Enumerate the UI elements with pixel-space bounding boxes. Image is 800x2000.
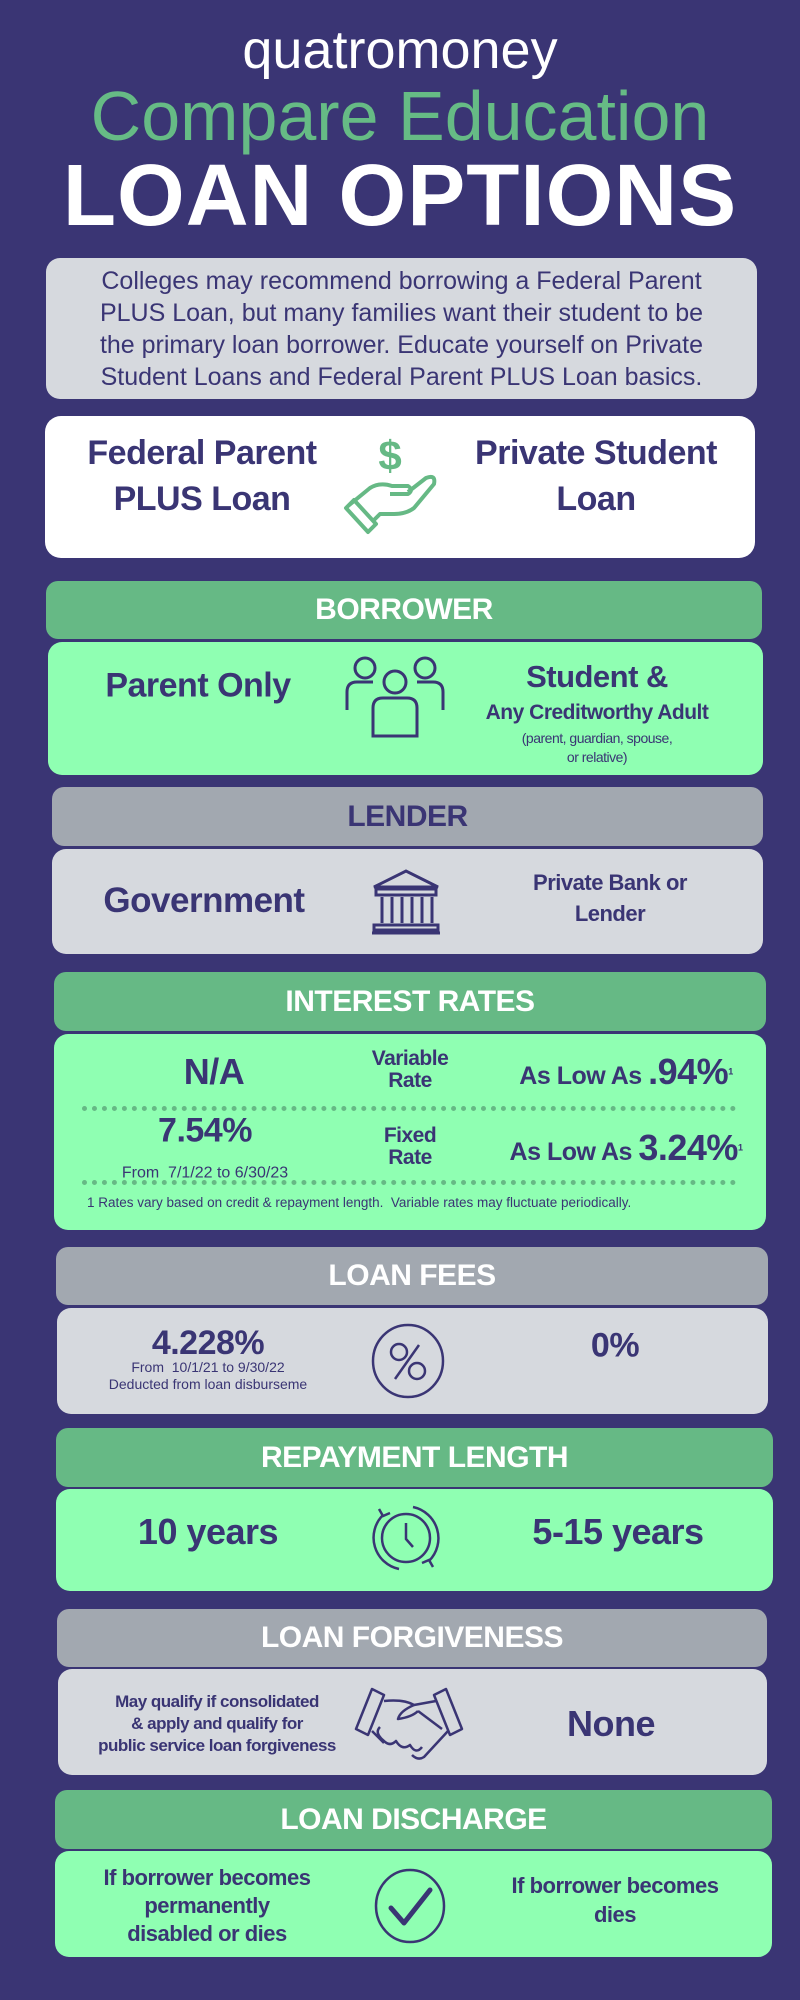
text: N/A: N/A (184, 1051, 244, 1092)
text: None: None (567, 1703, 655, 1744)
label: Fixed Rate: Rate (388, 1146, 432, 1169)
text: 7.54%: From 7/1/22 to 6/30/23 (122, 1164, 288, 1182)
label: Variable Rate: Variable (372, 1047, 448, 1070)
text: fixed private rate: As Low As 3.24%1 (510, 1127, 742, 1168)
text: Student & Any Creditworthy Adult: or relative) (567, 749, 627, 765)
right title: Private Student Loan: Private Student (475, 434, 717, 472)
panel: repayment length (56, 1489, 773, 1591)
intro text box: PLUS Loan, but many families want their student to be (100, 299, 703, 327)
text: discharge conditions federal: If borrower becomes (104, 1865, 310, 1890)
intro text box: Colleges may recommend borrowing a Federal Parent (101, 267, 702, 295)
icon: handshake (354, 1688, 464, 1760)
text: 4.228%: 4.228% (152, 1324, 264, 1362)
intro text box: Student Loans and Federal Parent PLUS Loan basics. (101, 363, 702, 391)
text: 5-15 years: 5-15 years (532, 1511, 704, 1552)
text: 7.54% (122, 1112, 288, 1182)
icon: hand with dollar: $ (378, 432, 402, 479)
icon: percent circle (372, 1324, 444, 1398)
text: Student & Any Creditworthy Adult (486, 659, 709, 765)
icon: clock with arrows (372, 1506, 440, 1570)
panel: interest rates (54, 1034, 766, 1230)
text: forgiveness conditions: & apply and qualify for (131, 1714, 303, 1733)
header: LOAN FEES: LOAN FEES (328, 1259, 496, 1292)
header: BORROWER (46, 581, 762, 639)
label: Fixed Rate: Fixed (384, 1124, 436, 1147)
text: discharge conditions federal (104, 1865, 310, 1946)
header: INTEREST RATES: INTEREST RATES (285, 984, 535, 1018)
left title: Federal Parent PLUS Loan: PLUS Loan (114, 480, 290, 518)
right title: Private Student Loan (475, 434, 718, 518)
text: variable private rate: As Low As .94%1 (519, 1051, 733, 1092)
header: LOAN FORGIVENESS: LOAN FORGIVENESS (261, 1621, 563, 1654)
header: LOAN FEES (56, 1247, 768, 1305)
text: 0%: 0% (591, 1326, 639, 1364)
text: Government: Government (103, 881, 305, 920)
intro text box (46, 258, 757, 399)
left title: Federal Parent PLUS Loan (87, 434, 317, 518)
text: 7.54%: 7.54% (158, 1112, 252, 1150)
text: forgiveness conditions: public service loan forgiveness (98, 1736, 336, 1755)
text: 4.228%: From 10/1/21 to 9/30/22 (131, 1359, 285, 1375)
icon: bank building (372, 869, 440, 934)
text: discharge conditions federal: permanently (144, 1893, 270, 1918)
footnote: 1 Rates vary based on credit & repayment length. Variable rates may fluctuate periodically. (87, 1195, 631, 1210)
header: LOAN DISCHARGE: LOAN DISCHARGE (280, 1802, 547, 1836)
text: Parent Only: Parent Only (105, 666, 291, 704)
text: discharge conditions federal: disabled or dies (127, 1921, 287, 1946)
text: 4.228%: Deducted from loan disburseme (109, 1376, 307, 1392)
header: LOAN DISCHARGE (55, 1790, 772, 1849)
panel: loan discharge (55, 1851, 772, 1957)
header: REPAYMENT LENGTH: REPAYMENT LENGTH (261, 1440, 568, 1474)
label: Fixed Rate (384, 1124, 436, 1169)
panel: loan forgiveness (58, 1669, 767, 1775)
text: discharge conditions private: dies (594, 1902, 636, 1927)
title: LOAN OPTIONS: LOAN OPTIONS (63, 147, 737, 244)
text: Student & Any Creditworthy Adult: Any Creditworthy Adult (486, 701, 708, 724)
panel: borrower (48, 642, 763, 775)
header: LENDER (52, 787, 763, 846)
panel: loan fees (57, 1308, 768, 1414)
label: Variable Rate (372, 1047, 448, 1092)
header: LENDER: LENDER (347, 800, 468, 832)
panel: lender (52, 849, 763, 954)
header: INTEREST RATES (54, 972, 766, 1031)
logo: quatromoney: quatromoney (242, 20, 558, 80)
label: Variable Rate: Rate (388, 1069, 432, 1092)
subtitle: Compare Education: Compare Education (91, 77, 709, 155)
text: Student & Any Creditworthy Adult: Student & (526, 659, 668, 694)
icon: hand with dollar (344, 432, 436, 534)
text: Private Bank or Lender: Lender (575, 901, 645, 926)
header: REPAYMENT LENGTH (56, 1428, 773, 1487)
text: discharge conditions private: If borrower becomes (512, 1873, 718, 1898)
header: BORROWER: BORROWER (315, 593, 493, 626)
right title: Private Student Loan: Loan (556, 480, 636, 518)
intro text box: the primary loan borrower. Educate yourself on Private (100, 331, 703, 359)
text: forgiveness conditions (98, 1692, 336, 1755)
text: Student & Any Creditworthy Adult: (parent, guardian, spouse, (522, 730, 672, 746)
text: forgiveness conditions: May qualify if consolidated (115, 1692, 319, 1711)
text: Private Bank or Lender: Private Bank or (533, 870, 687, 895)
left title: Federal Parent PLUS Loan: Federal Parent (87, 434, 317, 472)
comparison title panel (45, 416, 755, 558)
icon: people (346, 656, 444, 738)
icon: check circle (374, 1868, 446, 1944)
text: 10 years: 10 years (138, 1511, 278, 1552)
text: discharge conditions private (512, 1873, 718, 1927)
text: 4.228% (109, 1324, 307, 1392)
header: LOAN FORGIVENESS (57, 1609, 767, 1667)
text: Private Bank or Lender (533, 870, 688, 926)
